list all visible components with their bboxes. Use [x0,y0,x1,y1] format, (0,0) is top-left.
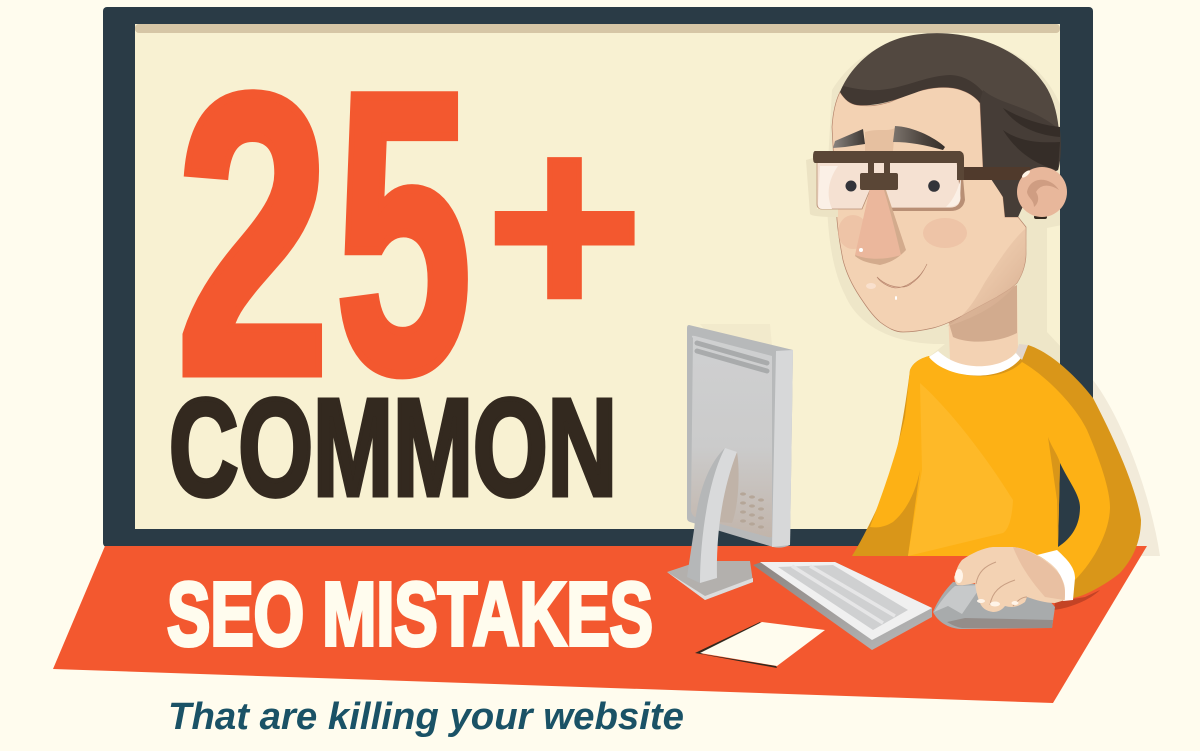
brow shading [865,128,895,151]
vent dots [740,492,764,529]
lens back shadow [885,166,965,211]
sweater shadow side [852,345,1141,598]
collar [929,344,1028,376]
sideburn darker [980,90,1061,217]
person shadow on wall [828,48,1060,364]
arm crease [1048,437,1060,547]
sleeve shadow on background [1093,380,1160,556]
hair darker fringe [840,75,983,105]
sweater [852,285,1141,598]
mouth [877,264,927,288]
subtitle: That are killing your website [168,696,684,738]
monitor back [687,325,793,548]
headline: COMMON: COMMON [169,371,617,525]
head [806,33,1067,332]
paper [695,622,825,668]
desk [53,546,1147,703]
headline: 25+ [176,9,643,458]
headline: 25+: + [486,75,643,376]
fingernails [955,569,1018,606]
nose [855,188,906,265]
chin highlight [895,296,897,300]
arm gap showing frame [1058,463,1080,547]
jaw shading [945,228,1027,327]
monitor stand [687,448,725,583]
arm shadow on desk [1054,590,1100,610]
lens shine [818,166,838,209]
dimple [866,283,876,289]
glasses shadow [806,158,838,217]
face [832,87,1026,332]
headline: 25+: 2 [176,11,330,458]
headline: 25+: 5 [335,9,472,456]
pupils [846,180,940,192]
cheeks [838,215,967,249]
monitor base [667,561,753,600]
eyebrows [833,126,945,150]
keyboard [753,562,932,650]
monitor [667,325,793,600]
bridge prongs [860,158,898,190]
screen frame [103,7,1093,547]
cuff [1037,550,1075,601]
lenses [817,162,961,209]
headline: SEO MISTAKES: SEO MISTAKES [167,565,653,665]
sweater main light [870,356,1110,580]
chest highlight [908,383,1013,556]
glare behind monitor top [700,324,772,346]
glasses temple [957,167,1030,180]
neck [948,285,1018,380]
monitor panel [691,336,772,537]
hair streaks [1003,108,1060,170]
monitor side [772,350,793,547]
stand shadow on panel [718,452,739,523]
glasses [806,151,1030,265]
vent slots [697,343,767,371]
mouse [933,582,1100,629]
ear [1017,167,1067,219]
glasses top bar [813,151,964,180]
hair [840,33,1059,217]
hand [954,547,1065,612]
